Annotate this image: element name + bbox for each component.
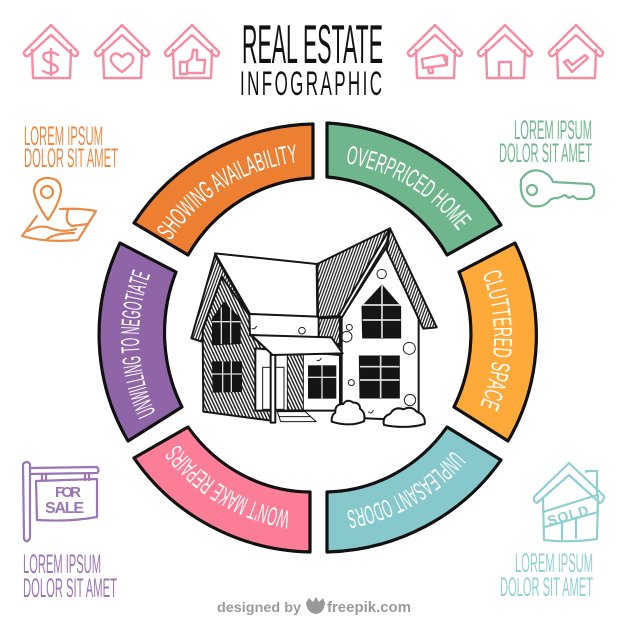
lower left window: [212, 361, 242, 393]
icon: house with door: [478, 25, 532, 78]
upper left window: [212, 302, 241, 345]
text: REAL ESTATE: [242, 13, 383, 75]
segment: overpriced home: OVERPRICED HOME: [347, 146, 472, 230]
title: [240, 13, 386, 103]
text: LOREM IPSUM: [23, 549, 101, 579]
panel: ring of six issues: [97, 121, 538, 554]
segment: overpriced home: [325, 121, 503, 257]
icon: house with check: [549, 25, 603, 78]
porch wall and door: [255, 348, 340, 411]
text block: teal caption: [500, 548, 593, 602]
footer credit: freepik.com: [327, 599, 411, 616]
icon: house with heart: [95, 25, 149, 78]
title: INFOGRAPHIC: [240, 65, 386, 103]
porch roof: [251, 335, 343, 355]
big roof slope: [317, 228, 390, 317]
segment: won't make repairs: WON'T MAKE REPAIRS: [166, 446, 288, 528]
text block: orange caption: [24, 121, 118, 173]
icon: for sale sign: FOR: [55, 484, 81, 501]
segment: showing availability: [132, 122, 315, 257]
segment: unwilling to negotiate: UNWILLING TO NEGOTIATE: [120, 269, 155, 420]
text: DOLOR SIT AMET: [24, 143, 118, 173]
segment: unpleasant odors: UNPLEASANT ODORS: [348, 452, 466, 528]
icon: map pin: [22, 178, 96, 241]
footer credit: designed by: [217, 599, 301, 615]
icon: key: [521, 170, 594, 206]
icon: for sale sign: SALE: [45, 500, 84, 517]
segment: unpleasant odors: [325, 425, 503, 554]
icon: house with thumbs up: [165, 25, 219, 78]
segment: cluttered space: [452, 241, 538, 443]
lower right window: [359, 356, 399, 398]
text block: purple caption: [23, 549, 117, 603]
porch post and steps: [271, 355, 316, 423]
icon: sold house: [534, 463, 604, 541]
icon: house with dollar: [24, 25, 78, 78]
icon: house with megaphone: [408, 25, 462, 78]
text: LOREM IPSUM: [24, 121, 103, 151]
icon: sold house: SOLD: [545, 502, 590, 529]
segment: unwilling to negotiate: [97, 241, 184, 443]
right wall: [342, 243, 419, 421]
text block: green caption: [499, 115, 592, 168]
right barge: [387, 228, 437, 329]
segment: won't make repairs: [132, 425, 312, 554]
illustration: sketched house: [191, 228, 437, 427]
band below roof: [249, 314, 341, 347]
left wall: [203, 277, 272, 421]
left gable barge: [191, 255, 250, 342]
icon: for sale sign: [23, 462, 98, 541]
main roof: [215, 253, 317, 317]
upper right window: [362, 285, 401, 338]
segment: cluttered space: CLUTTERED SPACE: [480, 270, 512, 412]
wall stones: [252, 269, 416, 413]
segment: showing availability: SHOWING AVAILABILITY: [157, 144, 296, 240]
footer credit: [217, 597, 411, 616]
text: DOLOR SIT AMET: [23, 573, 117, 603]
porch window: [308, 365, 336, 399]
bushes: [332, 401, 425, 427]
